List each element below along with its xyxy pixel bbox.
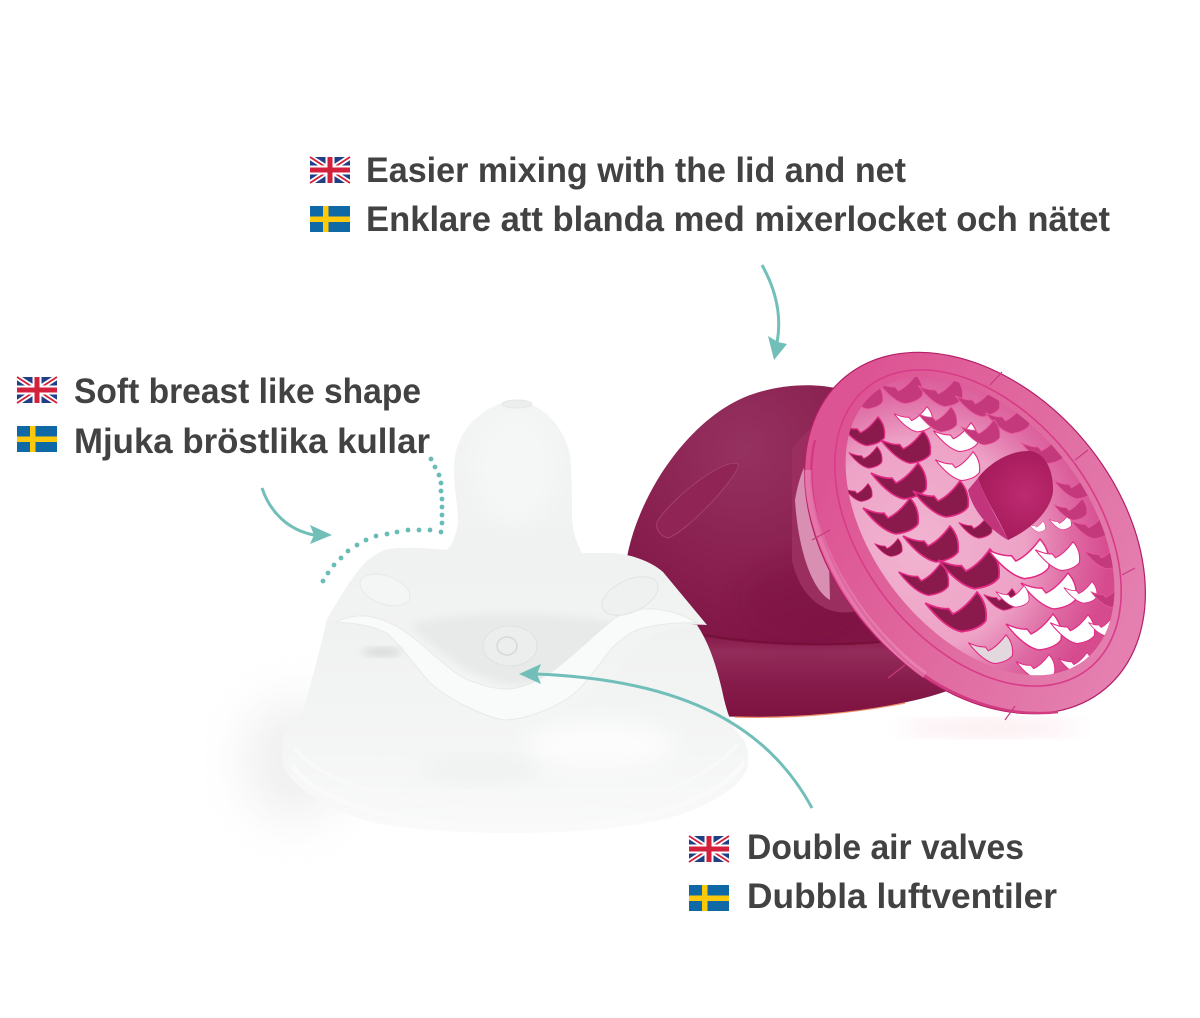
dotted curve: breast shape outline — [321, 457, 444, 583]
net: pink ring and mesh — [804, 352, 1146, 720]
arrow: to lid — [762, 265, 787, 360]
lid dome — [627, 385, 900, 646]
teat wave lip — [337, 609, 697, 720]
embossed logo on dome — [657, 463, 738, 538]
caption: English mixing: Easier mixing with the lid and net — [366, 151, 906, 190]
icon: Swedish flag — [689, 885, 729, 911]
caption: English valves: Double air valves — [747, 828, 1024, 867]
magenta holes — [862, 377, 1114, 608]
product shadows — [245, 700, 1080, 820]
flag pair and caption: mixing — [310, 151, 1110, 239]
caption: Swedish valves: Dubbla luftventiler — [747, 877, 1057, 916]
arrow: to air valve — [519, 664, 812, 808]
dark holes over dome — [840, 417, 1017, 632]
teat base dome and skirt — [282, 619, 748, 833]
caption: Swedish shape: Mjuka bröstlika kullar — [74, 422, 430, 461]
icon: UK flag — [310, 157, 350, 183]
teat head and flange — [327, 401, 707, 722]
white holes — [894, 407, 1116, 680]
caption: English shape: Soft breast like shape — [74, 372, 421, 411]
inner joint under net — [792, 420, 860, 613]
base highlight — [525, 721, 675, 769]
icon: UK flag — [689, 836, 729, 862]
net mesh — [846, 377, 1114, 676]
icon: Swedish flag — [310, 206, 350, 232]
flag pair and caption: air valves — [689, 828, 1057, 916]
teat: clear silicone nipple — [282, 400, 748, 833]
teat inner shading — [410, 614, 625, 686]
caption: Swedish mixing: Enklare att blanda med mixerlocket och nätet — [366, 200, 1110, 239]
air valve — [483, 626, 537, 666]
teat head highlight — [473, 415, 557, 525]
arrow: to breast shape — [262, 488, 332, 544]
icon: Swedish flag — [17, 426, 57, 452]
rim tick marks — [812, 372, 1135, 720]
flag pair and caption: breast shape — [17, 372, 430, 461]
icon: UK flag — [17, 377, 57, 403]
teat tip — [502, 400, 532, 408]
net outer rim — [735, 286, 1200, 780]
net knob — [978, 451, 1053, 540]
skirt edge rim — [292, 762, 744, 828]
side bumps — [356, 568, 414, 612]
lid: maroon dome — [627, 385, 950, 717]
lid base band — [690, 630, 950, 717]
